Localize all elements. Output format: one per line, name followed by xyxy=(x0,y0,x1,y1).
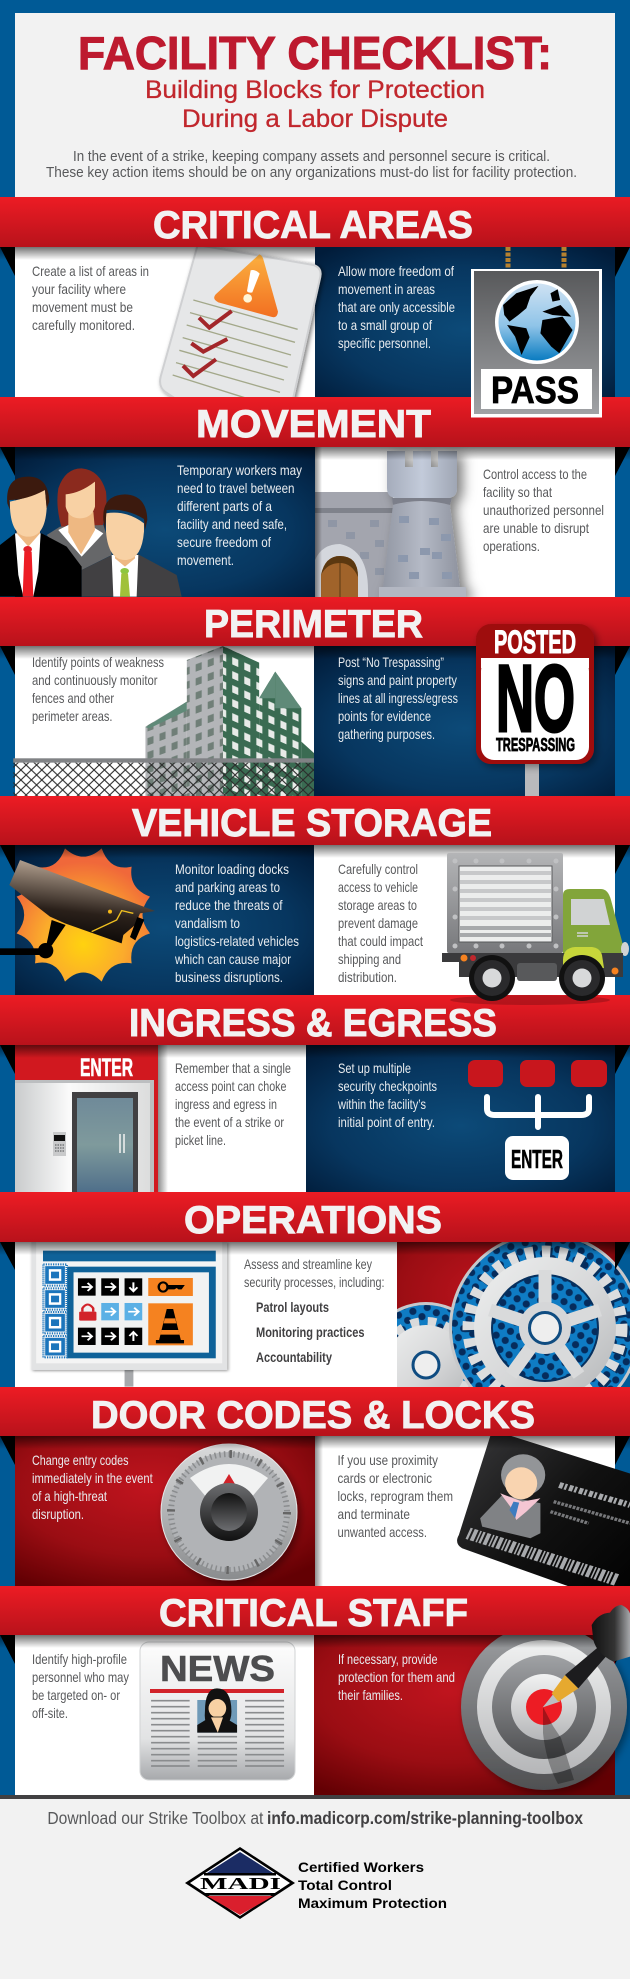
panel: vehicle storage right xyxy=(314,845,615,995)
text: carefully control: distribution. xyxy=(338,969,397,985)
icon: security camera xyxy=(0,848,155,982)
ribbon: critical staff: CRITICAL STAFF xyxy=(159,1592,468,1635)
text: identify points: fences and other xyxy=(32,690,114,706)
ribbon: movement xyxy=(0,397,630,460)
list: processes: Monitoring practices xyxy=(256,1324,365,1340)
icon: castle xyxy=(315,451,466,597)
text: temporary workers: different parts of a xyxy=(177,498,272,514)
ribbon: vehicle storage xyxy=(0,796,630,858)
text: monitor loading docks: business disruptions. xyxy=(175,969,283,985)
text: identify points: perimeter areas. xyxy=(32,708,112,724)
text: carefully control: storage areas to xyxy=(338,897,417,913)
text: allow more freedom xyxy=(338,263,455,351)
text: control access: are unable to disrupt xyxy=(483,520,589,536)
subtitle xyxy=(145,76,485,133)
text: create a list: movement must be xyxy=(32,299,133,315)
panel: operations left xyxy=(15,1242,397,1387)
list: processes xyxy=(256,1299,365,1365)
panel: ingress checkpoints xyxy=(306,1045,615,1192)
text: allow more freedom: Allow more freedom of xyxy=(338,263,454,279)
text: monitor loading docks: which can cause major xyxy=(174,951,291,967)
text: identify points: and continuously monitor xyxy=(32,672,158,688)
text: if necessary: protection for them and xyxy=(338,1669,455,1685)
icon: no trespassing sign xyxy=(476,624,594,796)
text: allow more freedom: movement in areas xyxy=(338,281,435,297)
intro paragraph xyxy=(46,149,577,181)
text: monitor loading docks: reduce the threats of xyxy=(175,897,283,913)
panel: critical areas left xyxy=(15,247,315,397)
text: proximity cards: If you use proximity xyxy=(338,1452,438,1468)
tagline xyxy=(298,1859,447,1911)
text: remember single access xyxy=(175,1060,291,1148)
side shadow triangles xyxy=(0,247,630,1664)
text: temporary workers: Temporary workers may xyxy=(177,462,302,478)
intro paragraph: These key action items should be on any organizations must-do list for facility protection. xyxy=(46,165,577,181)
text: change entry codes: Change entry codes xyxy=(32,1452,128,1468)
text: identify points: Identify points of weakness xyxy=(32,654,164,670)
list: processes: Accountability xyxy=(256,1349,332,1365)
icon: checklist with warning xyxy=(160,245,321,405)
text: proximity cards xyxy=(338,1452,453,1540)
ribbon: operations: OPERATIONS xyxy=(184,1199,442,1242)
ribbon: perimeter: PERIMETER xyxy=(204,603,423,646)
panel: ingress door image xyxy=(15,1045,158,1192)
panel: door codes right xyxy=(315,1436,630,1586)
text: set up checkpoints: within the facility’s xyxy=(337,1096,426,1112)
text: control access xyxy=(483,466,604,554)
text: control access: facility so that xyxy=(483,484,552,500)
text: allow more freedom: to a small group of xyxy=(338,317,432,333)
text: monitor loading docks: vandalism to xyxy=(175,915,240,931)
icon: gears xyxy=(397,1242,630,1387)
text: temporary workers: facility and need safe, xyxy=(177,516,287,532)
text: change entry codes xyxy=(32,1452,153,1522)
list: processes: Patrol layouts xyxy=(256,1299,329,1315)
text: create a list: carefully monitored. xyxy=(32,317,135,333)
text: identify high-profile: personnel who may xyxy=(32,1669,129,1685)
ribbon: vehicle storage: VEHICLE STORAGE xyxy=(132,802,492,845)
panel: perimeter left xyxy=(13,646,315,796)
icon: pass badge: PASS xyxy=(491,370,579,412)
text: post no trespassing: Post “No Trespassing” xyxy=(338,654,444,670)
text: assess and streamline: security processes, including: xyxy=(244,1274,384,1290)
download line: info.madicorp.com/strike-planning-toolbox xyxy=(267,1808,583,1828)
panel: critical areas right xyxy=(315,247,615,397)
icon: newspaper xyxy=(140,1642,295,1780)
text: allow more freedom: specific personnel. xyxy=(338,335,431,351)
icon: dart xyxy=(543,1605,630,1707)
text: control access: Control access to the xyxy=(483,466,587,482)
text: if necessary: their families. xyxy=(338,1687,403,1703)
diagram: checkpoints to enter xyxy=(468,1060,607,1180)
text: set up checkpoints xyxy=(337,1060,437,1130)
text: control access: unauthorized personnel xyxy=(483,502,604,518)
text: post no trespassing xyxy=(338,654,458,742)
text: carefully control: prevent damage xyxy=(338,915,418,931)
text: temporary workers xyxy=(177,462,302,568)
text: monitor loading docks xyxy=(174,861,299,985)
text: allow more freedom: that are only accessible xyxy=(338,299,455,315)
text: remember single access: the event of a strike or xyxy=(175,1114,284,1130)
text: carefully control: Carefully control xyxy=(338,861,418,877)
panel: movement right xyxy=(315,447,615,597)
text: if necessary: If necessary, provide xyxy=(338,1651,438,1667)
footer xyxy=(0,1795,630,1979)
panel: operations gears xyxy=(397,1242,630,1387)
ribbon: critical staff xyxy=(0,1586,630,1648)
ribbon: door codes and locks xyxy=(0,1387,630,1449)
text: monitor loading docks: and parking areas to xyxy=(175,879,280,895)
text: remember single access: ingress and egress in xyxy=(175,1096,277,1112)
logo: madi xyxy=(185,1847,295,1919)
text: post no trespassing: lines at all ingress/egress xyxy=(338,690,458,706)
text: proximity cards: locks, reprogram them xyxy=(338,1488,453,1504)
text: post no trespassing: points for evidence xyxy=(338,708,431,724)
panel: vehicle storage left xyxy=(15,845,314,995)
text: identify high-profile: off-site. xyxy=(32,1705,68,1721)
text: monitor loading docks: logistics-related vehicles xyxy=(175,933,299,949)
text: temporary workers: secure freedom of xyxy=(177,534,271,550)
text: set up checkpoints: initial point of entry. xyxy=(338,1114,435,1130)
icon: delivery truck xyxy=(442,853,629,1005)
text: create a list: your facility where xyxy=(32,281,126,297)
text: change entry codes: of a high-threat xyxy=(32,1488,107,1504)
label: enter: ENTER xyxy=(80,1054,133,1082)
icon: safe dial xyxy=(161,1444,297,1580)
intro paragraph: In the event of a strike, keeping company assets and personnel secure is critical. xyxy=(73,149,550,165)
icon: security board xyxy=(31,1242,227,1387)
ribbon: ingress and egress: INGRESS & EGRESS xyxy=(129,1002,497,1045)
subtitle: During a Labor Dispute xyxy=(182,105,448,133)
text: create a list: Create a list of areas in xyxy=(32,263,149,279)
text: assess and streamline xyxy=(244,1256,384,1290)
text: remember single access: picket line. xyxy=(175,1132,226,1148)
text: set up checkpoints: security checkpoints xyxy=(338,1078,437,1094)
icon: no trespassing sign: TRESPASSING xyxy=(496,735,575,755)
panel: critical staff left xyxy=(15,1635,314,1795)
panel: door codes left xyxy=(15,1436,315,1586)
panel: critical staff right xyxy=(314,1624,627,1795)
text: temporary workers: movement. xyxy=(177,552,234,568)
icon: pass badge xyxy=(471,247,602,418)
ribbon: operations xyxy=(0,1192,630,1255)
tagline: Maximum Protection xyxy=(298,1895,447,1911)
text: identify high-profile: Identify high-profile xyxy=(32,1651,127,1667)
text: identify high-profile: be targeted on- or xyxy=(32,1687,120,1703)
text: change entry codes: disruption. xyxy=(32,1506,84,1522)
text: remember single access: access point can choke xyxy=(175,1078,287,1094)
text: control access: operations. xyxy=(483,538,540,554)
text: identify high-profile xyxy=(32,1651,129,1721)
ribbon: movement: MOVEMENT xyxy=(196,403,431,446)
text: post no trespassing: signs and paint property xyxy=(338,672,457,688)
icon: buildings and fence xyxy=(13,646,314,796)
icon: security team xyxy=(0,468,182,597)
text: carefully control xyxy=(338,861,423,985)
ribbon: perimeter xyxy=(0,597,630,659)
icon: no trespassing sign: POSTED xyxy=(494,624,576,660)
text: assess and streamline: Assess and streamline key xyxy=(244,1256,372,1272)
text: carefully control: access to vehicle xyxy=(338,879,418,895)
ribbon: critical areas xyxy=(0,197,630,260)
panel: perimeter right xyxy=(314,646,615,796)
text: set up checkpoints: Set up multiple xyxy=(338,1060,411,1076)
diagram: checkpoints to enter: ENTER xyxy=(511,1144,563,1174)
text: identify points xyxy=(32,654,164,724)
ribbon: ingress and egress xyxy=(0,995,630,1058)
tagline: Total Control xyxy=(298,1877,392,1893)
ribbon: critical areas: CRITICAL AREAS xyxy=(153,204,473,247)
header panel xyxy=(15,13,615,197)
text: post no trespassing: gathering purposes. xyxy=(338,726,435,742)
text: carefully control: that could impact xyxy=(338,933,423,949)
text: remember single access: Remember that a single xyxy=(175,1060,291,1076)
icon: id card xyxy=(457,1436,630,1586)
logo: madi: MADI xyxy=(200,1874,282,1893)
text: change entry codes: immediately in the event xyxy=(32,1470,153,1486)
text: create a list xyxy=(32,263,149,333)
text: carefully control: shipping and xyxy=(338,951,401,967)
text: monitor loading docks: Monitor loading docks xyxy=(175,861,289,877)
text: proximity cards: cards or electronic xyxy=(338,1470,432,1486)
download line: Download our Strike Toolbox at xyxy=(47,1808,264,1828)
ribbon: door codes and locks: DOOR CODES & LOCKS xyxy=(91,1394,535,1437)
icon: target xyxy=(461,1624,627,1790)
text: if necessary xyxy=(338,1651,455,1703)
text: proximity cards: and terminate xyxy=(338,1506,410,1522)
icon: newspaper: NEWS xyxy=(160,1648,275,1689)
text: temporary workers: need to travel between xyxy=(177,480,294,496)
panel: ingress text xyxy=(158,1045,306,1192)
tagline: Certified Workers xyxy=(298,1859,424,1875)
panel: movement left xyxy=(15,447,315,597)
text: proximity cards: unwanted access. xyxy=(338,1524,427,1540)
subtitle: Building Blocks for Protection xyxy=(145,76,485,104)
title: FACILITY CHECKLIST: xyxy=(78,27,552,79)
